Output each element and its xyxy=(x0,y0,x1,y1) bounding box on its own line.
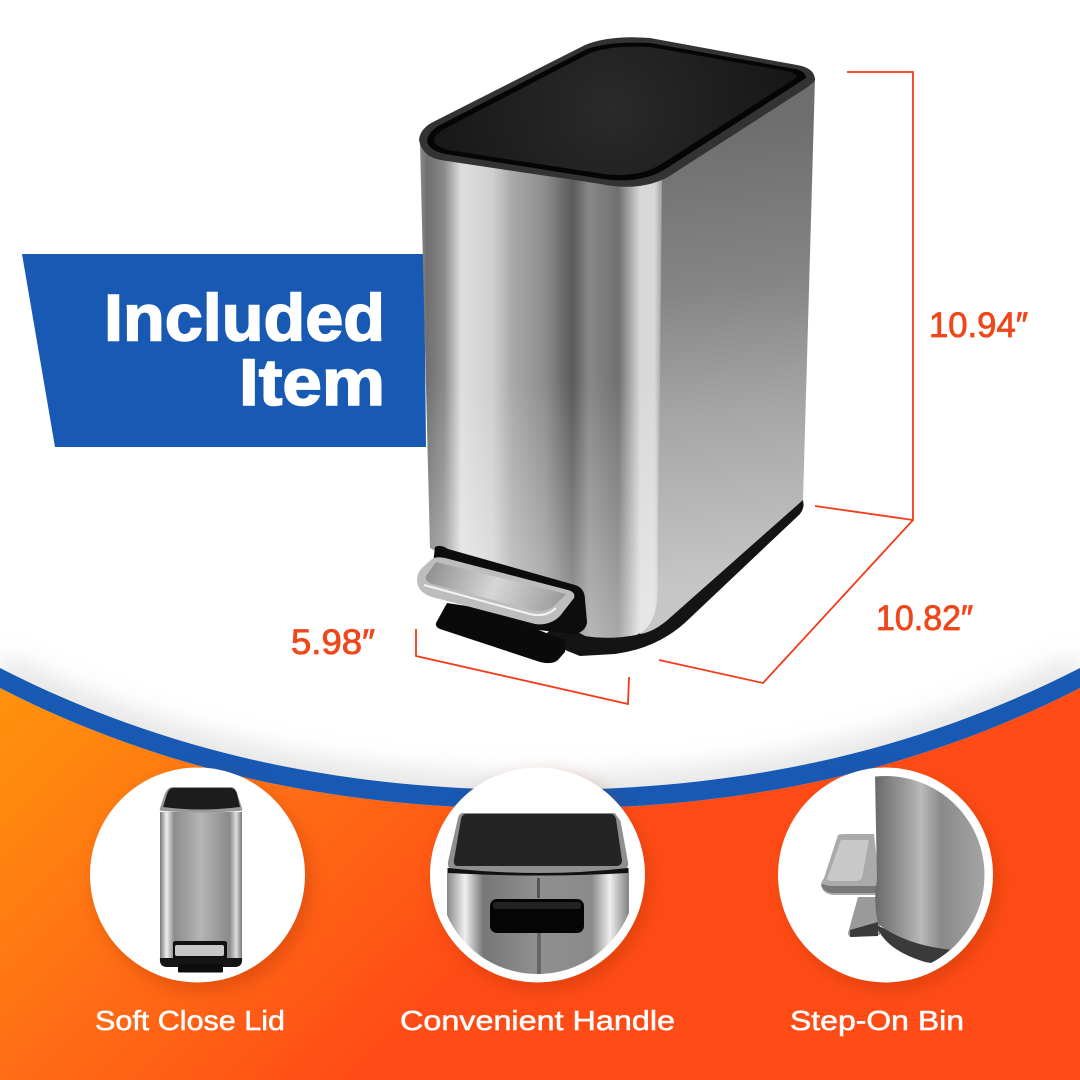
feature: convenient handle xyxy=(400,768,675,1036)
pedal silver rim xyxy=(417,557,574,624)
bin base xyxy=(540,498,804,656)
lid rim xyxy=(419,37,815,187)
label: height: 10.94″ xyxy=(929,306,1028,345)
caption: Convenient Handle xyxy=(400,1005,675,1036)
blue curved band xyxy=(0,668,1080,809)
orange gradient footer xyxy=(0,688,1080,1080)
handle close-up image xyxy=(447,813,629,988)
bin base close-up xyxy=(878,926,956,963)
bin body close-up xyxy=(875,775,990,950)
front face lower highlight xyxy=(425,380,658,638)
pedal lower shine xyxy=(424,585,556,615)
feature: step-on bin xyxy=(778,768,998,1036)
bin front face xyxy=(420,143,662,638)
bin side face xyxy=(640,78,815,634)
heading: included item: Item xyxy=(239,345,385,419)
label: width: 5.98″ xyxy=(291,623,375,662)
soft shadow above curve xyxy=(0,668,1080,790)
product: main stainless steel bin xyxy=(417,37,815,663)
panel: included item banner xyxy=(22,254,426,447)
lid black inner xyxy=(434,47,796,175)
caption: Step-On Bin xyxy=(790,1005,964,1036)
mini bin image xyxy=(160,787,242,972)
lid groove xyxy=(427,43,806,180)
dimension: height line xyxy=(815,72,913,520)
dimension: depth line xyxy=(659,520,913,683)
dimension: width line xyxy=(416,629,629,704)
heading: included item: Included xyxy=(104,280,385,354)
caption: Soft Close Lid xyxy=(95,1005,285,1036)
heading: included item xyxy=(104,280,385,419)
pedal housing xyxy=(430,546,587,634)
label: depth: 10.82″ xyxy=(876,599,973,638)
pedal plate xyxy=(426,562,566,611)
pedal close-up image xyxy=(821,775,990,968)
feature: soft close lid xyxy=(90,768,310,1036)
pedal step xyxy=(436,603,565,663)
